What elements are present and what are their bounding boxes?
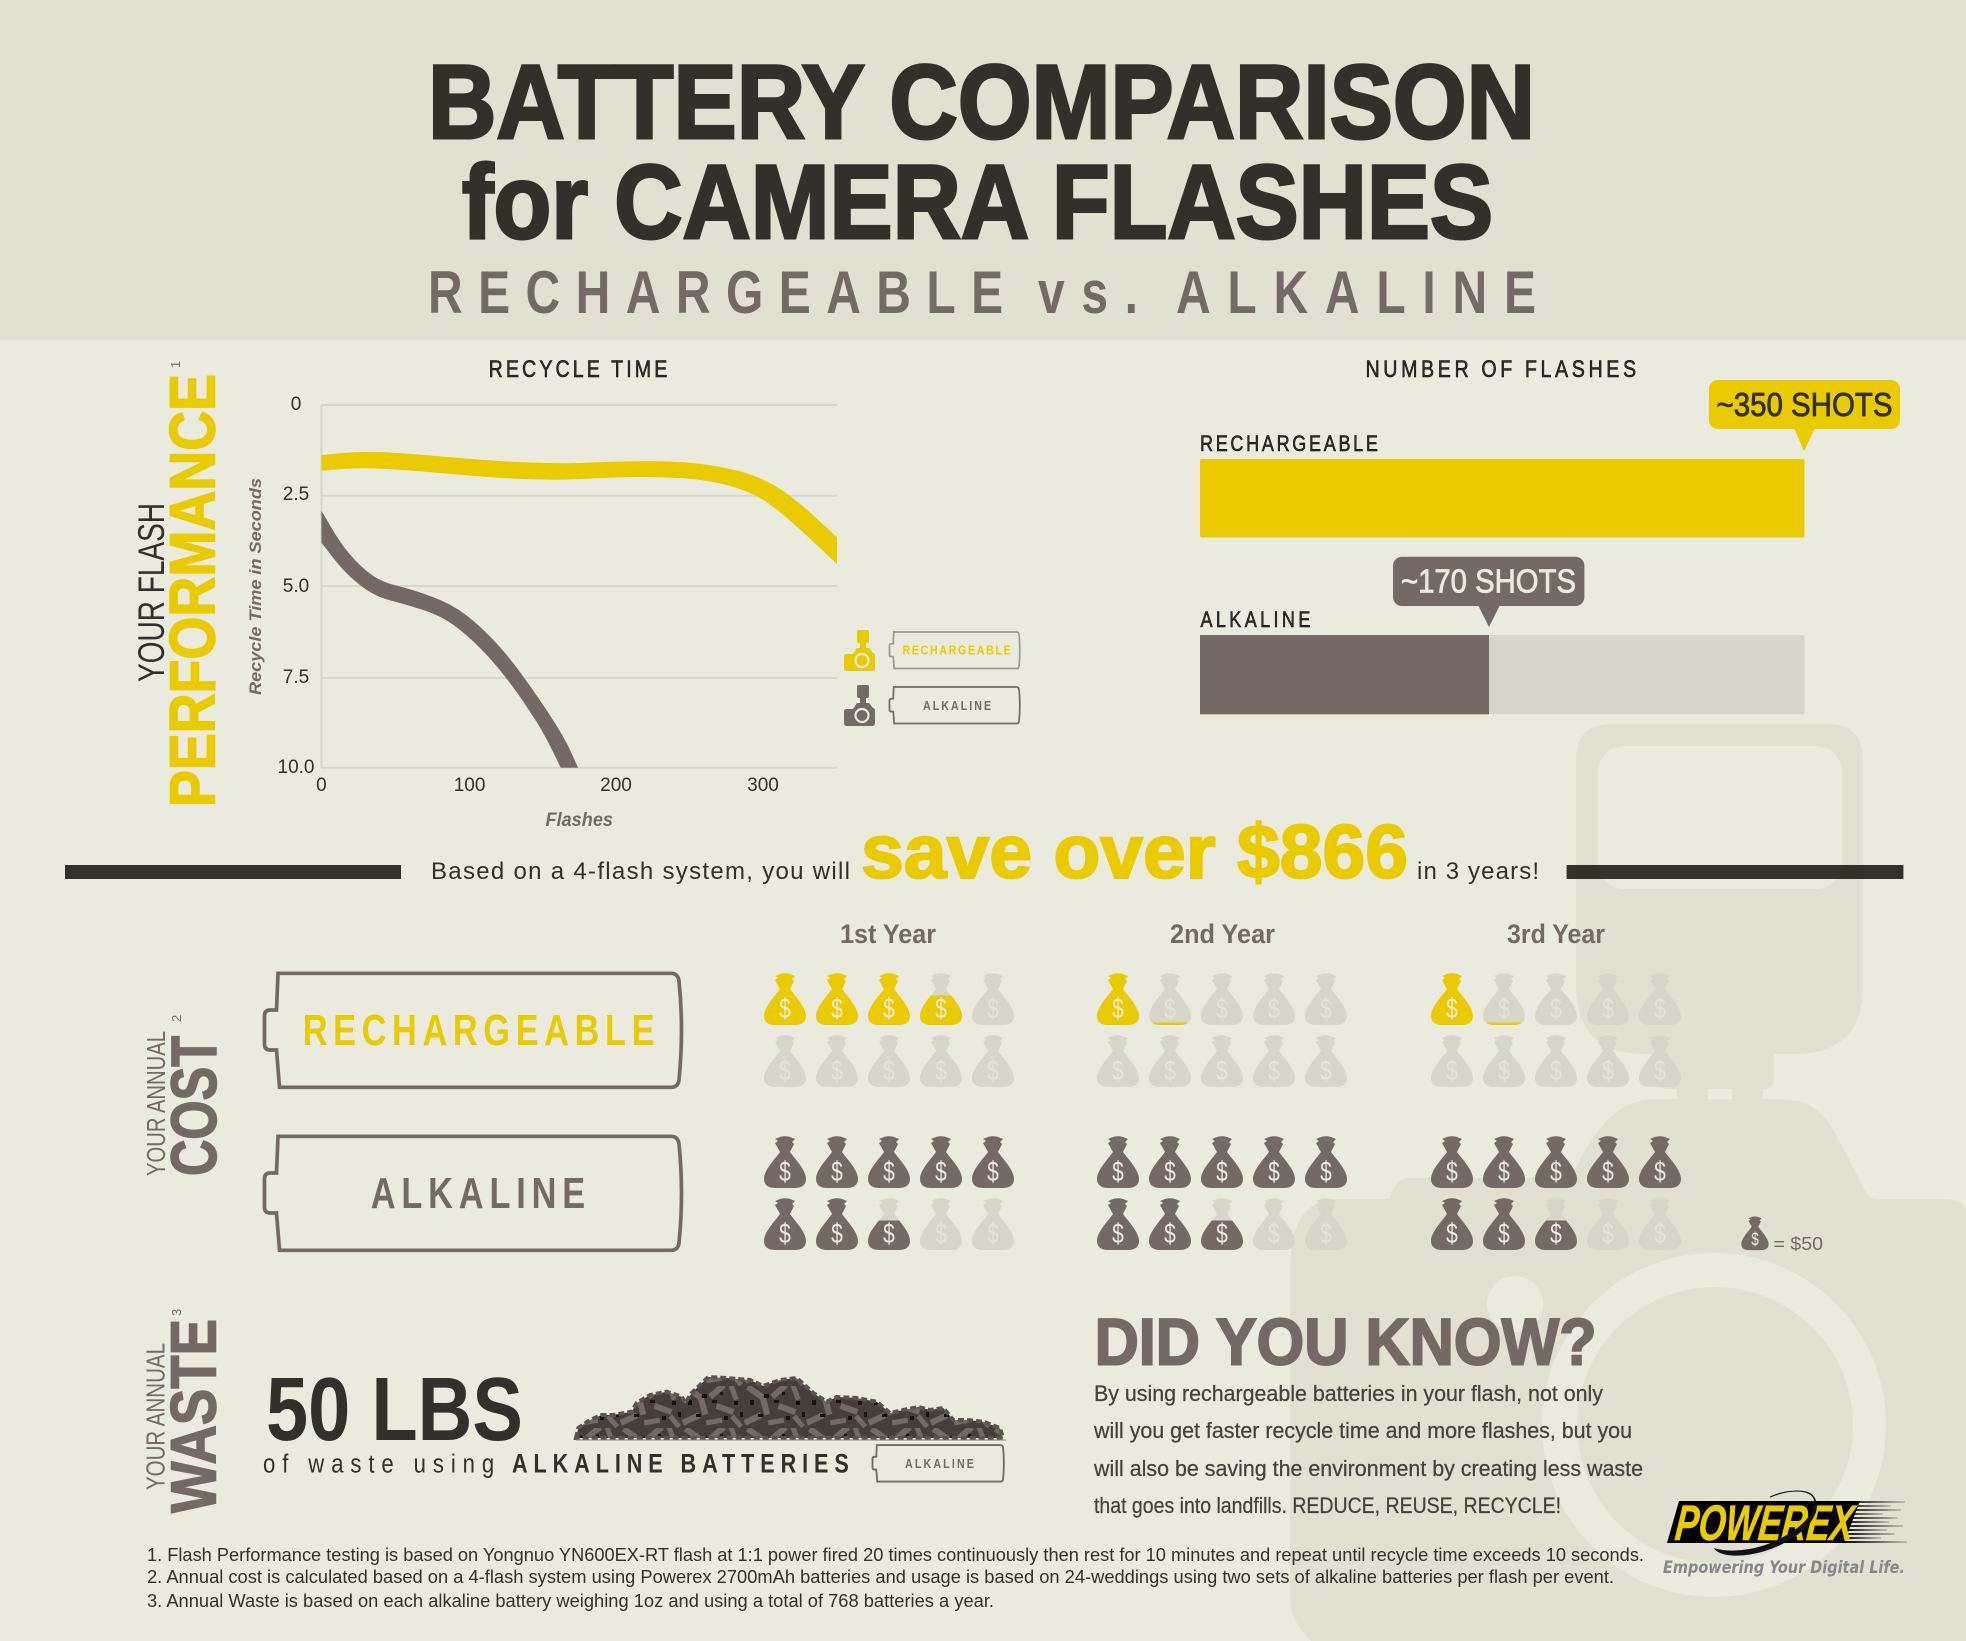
- money bags: rechargeable year 3: $: [1498, 994, 1510, 1025]
- money bags: alkaline year 1: $: [935, 1157, 947, 1188]
- money bags: rechargeable year 1: $: [779, 994, 791, 1025]
- key: one bag equals 50 dollars: = $50: [1774, 1234, 1823, 1254]
- footnotes: 3. Annual Waste is based on each alkaline battery weighing 1oz and using a total of 768 batteries a year.: [147, 1590, 994, 1611]
- line chart: recycle time: 7.5: [283, 667, 309, 688]
- money bags: rechargeable year 2: $: [1112, 994, 1124, 1025]
- callout: 170 shots: [1393, 557, 1584, 627]
- callout: 350 shots: ~350 SHOTS: [1716, 386, 1892, 423]
- legend: rechargeable: [844, 630, 1020, 671]
- money bags: alkaline year 2: $: [1216, 1219, 1228, 1250]
- line chart: recycle time: 300: [747, 775, 779, 796]
- legend: rechargeable: RECHARGEABLE: [902, 642, 1011, 658]
- savings headline: save over $866: [861, 810, 1408, 895]
- header band: [0, 0, 1966, 340]
- money bags: rechargeable year 3: $: [1654, 1056, 1666, 1087]
- section label: your flash performance: [131, 361, 229, 807]
- waste figure: 50 lbs: 50 LBS: [266, 1360, 523, 1460]
- money bags: rechargeable year 2: $: [1320, 994, 1332, 1025]
- money bags: rechargeable year 1: $: [935, 994, 947, 1025]
- title: BATTERY COMPARISON: [428, 44, 1535, 161]
- label: alkaline: ALKALINE: [1200, 608, 1310, 632]
- callout: 170 shots: ~170 SHOTS: [1401, 563, 1576, 600]
- battery label: alkaline: [264, 1136, 682, 1250]
- curve: alkaline: [321, 511, 578, 768]
- money bags: alkaline year 3: $: [1550, 1157, 1562, 1188]
- money bags: alkaline year 3: $: [1550, 1219, 1562, 1250]
- line chart: recycle time: 100: [454, 775, 485, 796]
- line chart: recycle time: 200: [600, 775, 632, 796]
- money bags: alkaline year 2: $: [1320, 1157, 1332, 1188]
- money bags: alkaline year 2: $: [1320, 1219, 1332, 1250]
- title: for CAMERA FLASHES: [462, 144, 1493, 261]
- key: one bag equals 50 dollars: $: [1751, 1230, 1759, 1250]
- key: one bag equals 50 dollars: [1741, 1217, 1823, 1254]
- money bags: alkaline year 2: $: [1268, 1157, 1280, 1188]
- section label: your flash performance: 1: [168, 361, 183, 368]
- subtitle: ALKALINE: [1176, 259, 1536, 326]
- battery label: [889, 632, 1020, 669]
- money bags: alkaline year 1: $: [987, 1219, 999, 1250]
- money bags: alkaline year 3: $: [1654, 1219, 1666, 1250]
- line chart: recycle time: [246, 394, 837, 831]
- line chart: recycle time: 10.0: [278, 757, 314, 778]
- axis label: flashes: Flashes: [546, 810, 613, 831]
- section label: your annual waste: WASTE: [157, 1319, 229, 1513]
- money bags: alkaline year 3: $: [1602, 1219, 1614, 1250]
- money bags: rechargeable year 2: $: [1216, 1056, 1228, 1087]
- divider right: [1567, 865, 1903, 879]
- money bags: rechargeable year 3: $: [1446, 994, 1458, 1025]
- section label: your annual cost: YOUR ANNUAL: [141, 1031, 171, 1176]
- year headings: 2nd Year: [1170, 919, 1275, 949]
- savings headline: [431, 810, 1539, 895]
- money bags: alkaline year 1: $: [779, 1219, 791, 1250]
- waste figure: 50 lbs: of waste using: [263, 1450, 494, 1479]
- money bags: rechargeable year 1: $: [883, 994, 895, 1025]
- line chart: recycle time: 0: [316, 775, 327, 796]
- logo: powerex: [1663, 1491, 1907, 1578]
- year headings: 3rd Year: [1507, 919, 1605, 949]
- section label: your annual cost: 2: [169, 1015, 184, 1022]
- legend: alkaline: ALKALINE: [923, 698, 991, 713]
- bar chart: number of flashes: [1200, 380, 1900, 714]
- money bags: alkaline year 1: $: [831, 1219, 843, 1250]
- battery pile illustration: [576, 1377, 1006, 1440]
- waste figure: 50 lbs: [263, 1360, 849, 1479]
- money bags: rechargeable year 1: $: [883, 1056, 895, 1087]
- bar: rechargeable: [1200, 459, 1804, 538]
- money bags: rechargeable year 2: $: [1216, 994, 1228, 1025]
- money bags: rechargeable year 2: $: [1164, 994, 1176, 1025]
- savings headline: Based on a 4-flash system, you will: [431, 858, 850, 885]
- subtitle: RECHARGEABLE: [428, 259, 1003, 326]
- money bags: alkaline year 1: [764, 1136, 1014, 1250]
- background illustration: camera with flash: [1290, 724, 1966, 1641]
- money bags: rechargeable year 2: $: [1112, 1056, 1124, 1087]
- money bags: alkaline year 3: $: [1498, 1157, 1510, 1188]
- logo: powerex: Empowering Your Digital Life.: [1663, 1558, 1905, 1578]
- text block: did you know: that goes into landfills. REDUCE, REUSE, RECYCLE!: [1094, 1493, 1561, 1518]
- money bags: alkaline year 3: $: [1498, 1219, 1510, 1250]
- section label: your flash performance: PERFORMANCE: [157, 374, 229, 807]
- waste figure: 50 lbs: ALKALINE BATTERIES: [512, 1450, 849, 1479]
- money bags: alkaline year 1: $: [779, 1157, 791, 1188]
- money bags: alkaline year 1: $: [883, 1157, 895, 1188]
- money bags: rechargeable year 1: $: [779, 1056, 791, 1087]
- money bags: alkaline year 1: $: [987, 1157, 999, 1188]
- battery label: [889, 687, 1020, 724]
- money bags: rechargeable year 2: $: [1164, 1056, 1176, 1087]
- money bags: alkaline year 2: [1097, 1136, 1347, 1250]
- money bags: rechargeable year 3: $: [1654, 994, 1666, 1025]
- logo: powerex: POWEREX: [1673, 1495, 1858, 1551]
- section label: your annual cost: COST: [158, 1036, 230, 1176]
- label: rechargeable: RECHARGEABLE: [1200, 432, 1378, 456]
- battery label: alkaline: ALKALINE: [371, 1169, 585, 1218]
- money bags: rechargeable year 1: $: [831, 994, 843, 1025]
- money bags: rechargeable year 1: $: [831, 1056, 843, 1087]
- money bags: alkaline year 3: [1431, 1136, 1681, 1250]
- year headings: 1st Year: [840, 919, 936, 949]
- money bags: rechargeable year 3: $: [1446, 1056, 1458, 1087]
- money bags: alkaline year 2: $: [1112, 1157, 1124, 1188]
- footnotes: 2. Annual cost is calculated based on a 4-flash system using Powerex 2700mAh batteries and usage is based on 24-weddings using two sets of alkaline batteries per flash per event.: [147, 1566, 1614, 1587]
- money bags: alkaline year 2: $: [1268, 1219, 1280, 1250]
- heading: did you know: DID YOU KNOW?: [1095, 1304, 1597, 1378]
- money bags: rechargeable year 1: $: [987, 994, 999, 1025]
- heading: number of flashes: NUMBER OF FLASHES: [1366, 355, 1636, 382]
- section label: your annual waste: 3: [169, 1309, 184, 1316]
- subtitle: vs.: [1038, 259, 1138, 326]
- money bags: alkaline year 2: $: [1112, 1219, 1124, 1250]
- money bags: rechargeable year 2: $: [1268, 994, 1280, 1025]
- money bags: alkaline year 1: $: [935, 1219, 947, 1250]
- battery label: alkaline waste: [873, 1445, 1004, 1482]
- money bags: rechargeable year 3: $: [1550, 1056, 1562, 1087]
- money bags: rechargeable year 1: [764, 973, 1014, 1087]
- money bags: alkaline year 3: $: [1654, 1157, 1666, 1188]
- money bags: rechargeable year 3: $: [1550, 994, 1562, 1025]
- swoosh: [1715, 1491, 1816, 1555]
- money bags: alkaline year 2: $: [1216, 1157, 1228, 1188]
- money bags: rechargeable year 2: $: [1268, 1056, 1280, 1087]
- battery label: alkaline waste: ALKALINE: [905, 1456, 974, 1471]
- text block: did you know: will also be saving the environment by creating less waste: [1093, 1456, 1643, 1481]
- money bags: alkaline year 3: $: [1602, 1157, 1614, 1188]
- section label: your flash performance: YOUR FLASH: [131, 503, 172, 682]
- speed lines: [1843, 1501, 1907, 1543]
- text block: did you know: [1093, 1381, 1643, 1518]
- title: [428, 44, 1535, 261]
- battery label: rechargeable: [264, 973, 682, 1087]
- divider left: [65, 865, 401, 879]
- battery label: rechargeable: RECHARGEABLE: [303, 1006, 654, 1055]
- money bags: rechargeable year 1: $: [935, 1056, 947, 1087]
- money bags: rechargeable year 2: $: [1320, 1056, 1332, 1087]
- money bags: alkaline year 1: $: [831, 1157, 843, 1188]
- legend: alkaline: [844, 685, 1020, 726]
- money bags: alkaline year 2: $: [1164, 1219, 1176, 1250]
- bar: alkaline: [1200, 635, 1804, 714]
- savings headline: in 3 years!: [1417, 858, 1539, 885]
- curve: rechargeable: [321, 452, 837, 564]
- year headings: [840, 919, 1605, 949]
- money bags: rechargeable year 3: $: [1498, 1056, 1510, 1087]
- axis label: seconds: Recycle Time in Seconds: [246, 478, 265, 695]
- icon: yellow camera: [844, 630, 875, 671]
- subtitle: [428, 259, 1536, 326]
- money bags: rechargeable year 3: $: [1602, 994, 1614, 1025]
- line chart: recycle time: 5.0: [283, 576, 309, 597]
- money bags: rechargeable year 1: $: [987, 1056, 999, 1087]
- line chart: recycle time: 0: [291, 394, 301, 415]
- money bags: alkaline year 3: $: [1446, 1157, 1458, 1188]
- text block: did you know: will you get faster recycle time and more flashes, but you: [1093, 1418, 1632, 1443]
- callout: 350 shots: [1709, 380, 1900, 451]
- text block: did you know: By using rechargeable batteries in your flash, not only: [1094, 1381, 1603, 1406]
- money bags: alkaline year 3: $: [1446, 1219, 1458, 1250]
- money bags: alkaline year 1: $: [883, 1219, 895, 1250]
- line chart: recycle time: 2.5: [283, 484, 309, 505]
- money bags: rechargeable year 3: $: [1602, 1056, 1614, 1087]
- footnotes: 1. Flash Performance testing is based on Yongnuo YN600EX-RT flash at 1:1 power fired 20 times continuously then rest for 10 minutes and repeat until recycle time exceeds 10 seconds.: [147, 1544, 1644, 1565]
- footnotes: [147, 1544, 1644, 1611]
- icon: brown camera: [844, 685, 875, 726]
- money bags: rechargeable year 3: [1431, 973, 1681, 1087]
- section label: your annual waste: YOUR ANNUAL: [140, 1343, 170, 1490]
- money bags: alkaline year 2: $: [1164, 1157, 1176, 1188]
- heading: recycle time: RECYCLE TIME: [489, 355, 667, 382]
- money bags: rechargeable year 2: [1097, 973, 1347, 1087]
